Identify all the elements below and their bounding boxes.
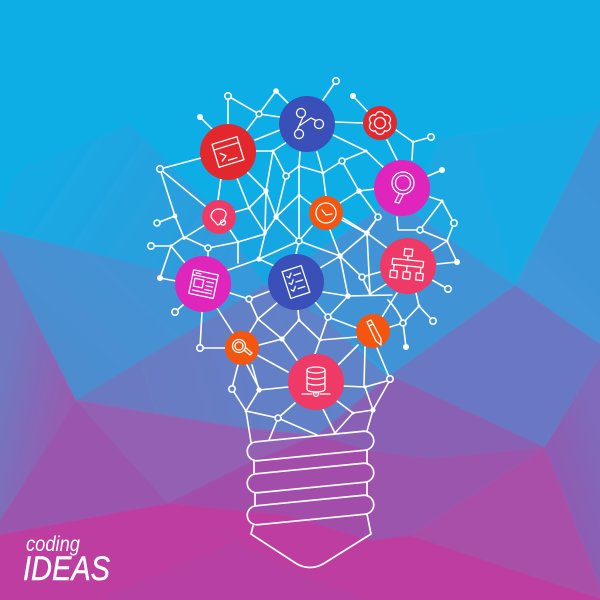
- network nodes: hollow: [148, 78, 457, 421]
- node: branch icon circle: [279, 96, 335, 152]
- node: pencil icon circle: [356, 314, 390, 348]
- network nodes: solid: [157, 88, 460, 434]
- title: coding ideas: [23, 533, 110, 588]
- node: bulb icon circle: [202, 200, 236, 234]
- node: hierarchy icon circle: [380, 238, 436, 294]
- title: coding ideas: IDEAS: [23, 550, 110, 588]
- node: clock icon circle: [309, 196, 343, 230]
- node: search icon circle: [225, 331, 259, 365]
- node: checklist icon circle: [268, 254, 324, 310]
- title: coding ideas: coding: [26, 533, 80, 556]
- node: terminal icon circle: [200, 124, 256, 180]
- node: gear icon circle: [363, 106, 397, 140]
- node: database icon circle: [288, 354, 344, 410]
- bulb network lines: [151, 81, 457, 442]
- node: web page icon circle: [175, 256, 231, 312]
- bulb screw base: [246, 430, 375, 568]
- node: magnifier icon circle: [374, 160, 430, 216]
